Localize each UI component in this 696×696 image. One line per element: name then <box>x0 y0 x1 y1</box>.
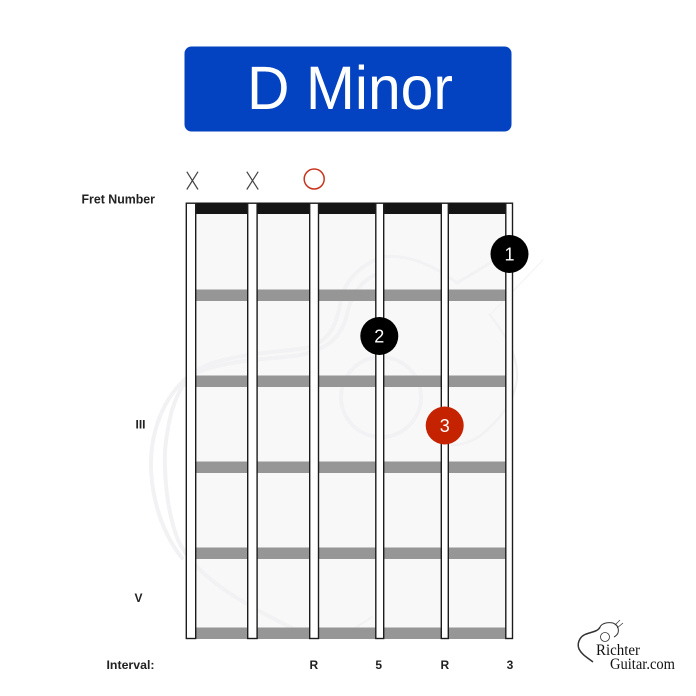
interval: string 4: R <box>309 658 318 672</box>
interval: string 2: R <box>440 658 449 672</box>
finger 1 <box>490 235 528 273</box>
finger 3 <box>426 406 464 444</box>
muted marker: string 5 <box>247 172 258 190</box>
logo: Guitar.com <box>610 656 675 673</box>
guitar watermark <box>151 255 543 630</box>
fret label III: III <box>135 418 146 432</box>
fretboard <box>151 202 543 639</box>
interval heading: Interval: <box>106 658 154 672</box>
fretboard background <box>190 214 510 628</box>
logo: wordmark: Richter <box>596 642 641 659</box>
finger 3: 3 <box>440 416 450 436</box>
frets <box>190 290 510 639</box>
logo: guitar outline <box>578 620 623 662</box>
open marker: string 4 <box>304 169 324 189</box>
interval: string 3: 5 <box>375 658 382 672</box>
finger 1: 1 <box>504 244 515 264</box>
finger 2: 2 <box>374 326 384 346</box>
logo <box>578 620 675 673</box>
title banner <box>184 46 512 132</box>
muted marker: string 6 <box>187 172 198 190</box>
strings <box>186 203 513 638</box>
open and muted string markers <box>187 169 324 190</box>
interval: string 1: 3 <box>507 658 514 672</box>
finger 2 <box>360 317 398 355</box>
nut <box>190 202 510 214</box>
fret label V: V <box>134 591 143 605</box>
fret number label: Fret Number <box>82 192 155 206</box>
interval labels <box>106 658 514 672</box>
title banner: D Minor <box>247 54 453 122</box>
